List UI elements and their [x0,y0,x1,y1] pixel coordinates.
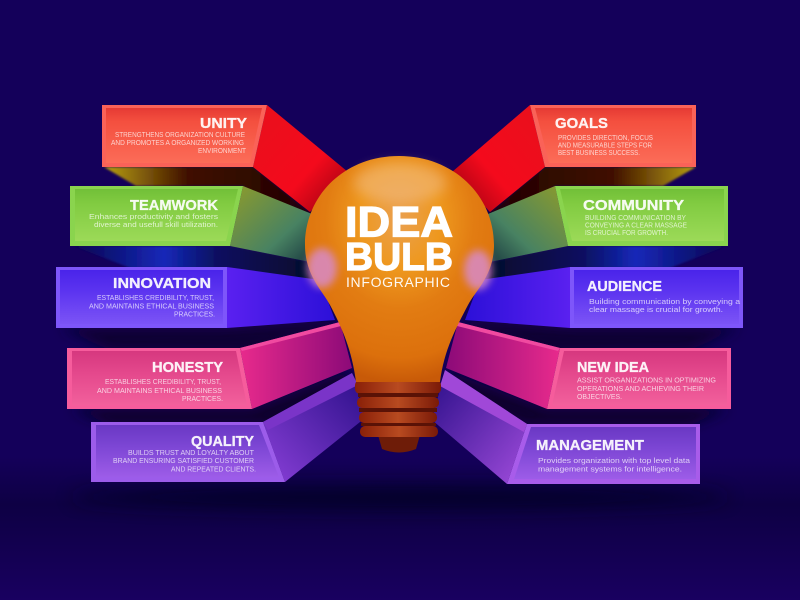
unity side [253,105,348,212]
new idea text [577,376,716,401]
new idea title: NEW IDEA [577,359,649,376]
goals text: BEST BUSINESS SUCCESS. [558,148,640,157]
honesty shadow [70,372,350,425]
goals underside [488,167,696,232]
innovation title: INNOVATION [113,275,211,292]
community underside [488,246,726,282]
floor shadow [70,485,730,509]
quality top edge [263,373,358,430]
new idea text: OPERATIONS AND ACHIEVING THEIR [577,384,704,393]
teamwork inner face [75,189,238,241]
innovation text: PRACTICES. [174,310,215,318]
panel: new idea [445,322,731,425]
management title: MANAGEMENT [536,437,644,454]
honesty title: HONESTY [152,359,223,376]
unity inner face [106,108,262,163]
new idea text: ASSIST ORGANIZATIONS IN OPTIMIZING [577,376,716,384]
panel: unity [102,105,348,232]
teamwork text: Enhances productivity and fosters [89,212,218,221]
panel: management [432,370,700,484]
panel: teamwork [70,186,312,282]
honesty side [240,322,352,409]
management text: management systems for intelligence. [538,464,682,474]
unity text [111,130,247,155]
management top edge [440,370,527,432]
teamwork face [70,186,243,246]
innovation face [56,267,227,328]
new idea side [446,322,560,409]
innovation text: ESTABLISHES CREDIBILITY, TRUST, [97,293,214,302]
title: idea: IDEA [345,198,453,246]
bulb glass [305,156,494,382]
bulb left reflection [307,248,337,288]
quality side [263,373,365,482]
unity title: UNITY [200,115,247,132]
new idea top edge [457,322,560,351]
bulb screw base [355,380,441,452]
management inner face [514,427,696,479]
panel: goals [452,105,696,232]
honesty inner face [72,351,247,405]
community text: BUILDING COMMUNICATION BY [585,213,686,222]
bulb right reflection [464,250,492,290]
goals text: AND MEASURABLE STEPS FOR [558,140,652,150]
audience text: clear massage is crucial for growth. [589,305,723,314]
panel: innovation [56,267,340,352]
management face [507,424,700,484]
audience text [589,297,740,314]
innovation text: AND MAINTAINS ETHICAL BUSINESS [89,302,214,310]
unity text: STRENGTHENS ORGANIZATION CULTURE [115,130,245,139]
innovation text [89,293,215,318]
community side [488,186,568,262]
teamwork text: diverse and usefull skill utilization. [94,220,218,229]
teamwork side [230,186,312,262]
honesty face [67,348,252,409]
honesty text: AND MAINTAINS ETHICAL BUSINESS [97,386,222,395]
audience shadow [460,320,740,352]
community text: CONVEYING A CLEAR MASSAGE [585,220,687,230]
community text: IS CRUCIAL FOR GROWTH. [585,228,668,237]
innovation shadow [60,320,340,352]
panel: honesty [67,322,352,425]
honesty text [97,377,223,403]
quality face [91,422,285,482]
quality text: AND REPEATED CLIENTS. [171,464,256,474]
audience face [570,267,743,328]
quality text [113,448,256,474]
management text: Provides organization with top level data [538,456,690,465]
new idea shadow [445,372,730,425]
honesty top edge [240,322,341,351]
community text [585,213,687,237]
honesty text: ESTABLISHES CREDIBILITY, TRUST, [105,377,221,386]
bulb highlight [354,163,446,203]
new idea face [547,348,731,409]
unity underside [104,167,312,232]
audience side [465,267,570,328]
quality text: BUILDS TRUST AND LOYALTY ABOUT [128,448,255,457]
goals face [530,105,696,167]
community title: COMMUNITY [583,197,684,214]
innovation inner face [60,270,223,324]
goals title: GOALS [555,115,608,132]
teamwork underside [74,246,312,282]
unity face [102,105,267,167]
panel: audience [460,267,743,352]
goals text: PROVIDES DIRECTION, FOCUS [558,133,653,142]
quality inner face [96,425,279,477]
unity text: AND PROMOTES A ORGANIZED WORKING [111,138,244,147]
quality title: QUALITY [191,433,254,450]
teamwork title: TEAMWORK [130,197,218,214]
innovation side [227,267,335,328]
goals side [452,105,545,212]
quality text: BRAND ENSURING SATISFIED CUSTOMER [113,456,254,465]
community inner face [560,189,724,241]
audience inner face [574,270,739,324]
title: bulb: BULB [345,236,453,279]
new idea text: OBJECTIVES. [577,392,622,401]
honesty text: PRACTICES. [182,394,223,403]
goals inner face [535,108,692,163]
new idea inner face [552,351,727,405]
panel: quality [91,373,365,482]
teamwork text [89,212,218,229]
management side [432,370,527,484]
management text [538,456,690,474]
community face [555,186,728,246]
unity text: ENVIRONMENT [198,146,247,155]
goals text [558,133,653,157]
subtitle: infographic: INFOGRAPHIC [346,274,450,290]
panel: community [488,186,728,282]
audience title: AUDIENCE [587,278,662,295]
light bulb [305,156,494,452]
audience text: Building communication by conveying a [589,297,740,306]
